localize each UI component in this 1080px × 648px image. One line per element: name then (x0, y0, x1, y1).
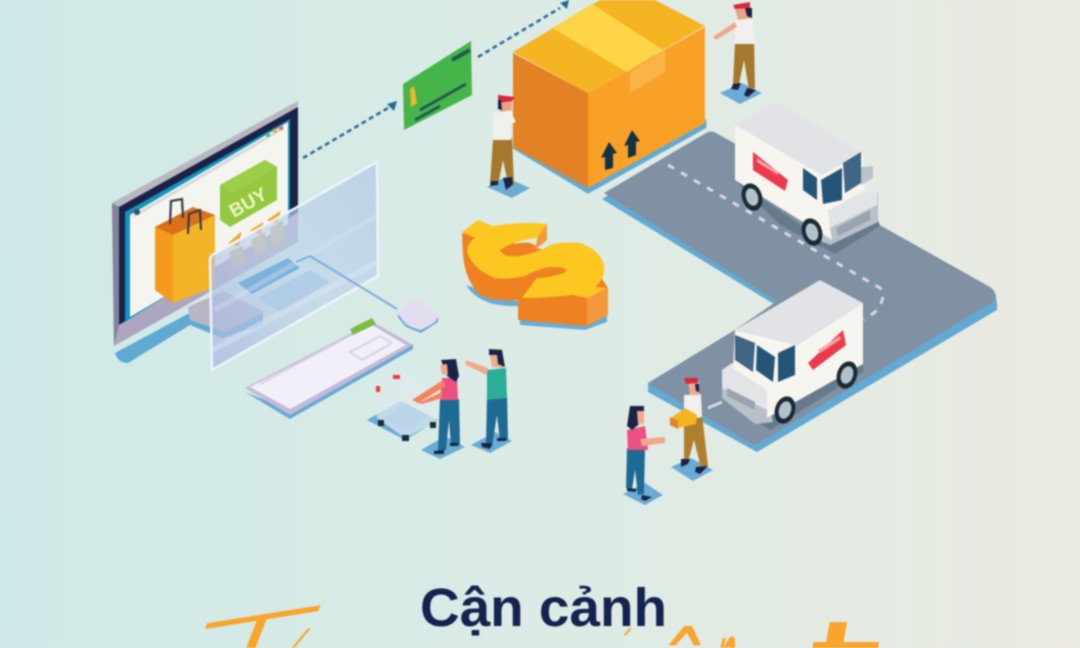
this-way-up arrows (601, 130, 640, 170)
van shadow (735, 180, 880, 254)
icon: computer monitor (112, 101, 298, 363)
item arrows (230, 213, 279, 245)
monitor shadow (115, 310, 263, 363)
icon: mouse (397, 300, 438, 333)
person: man pointing (465, 349, 512, 453)
monitor stand (188, 291, 265, 332)
shopping bag (155, 199, 215, 303)
BUY sign (220, 160, 277, 227)
shadow (466, 285, 607, 330)
van shadow (722, 360, 863, 430)
wheels (738, 181, 766, 213)
tape (552, 4, 663, 72)
heading: Thương mại điện tử (204, 604, 880, 648)
person: delivery worker by box (487, 95, 530, 198)
screen (130, 122, 288, 317)
van: upper (735, 102, 880, 254)
van: lower (722, 280, 863, 430)
dashed arrow: card to box (478, 0, 569, 57)
front and bumper (722, 375, 773, 424)
icon: keyboard (245, 318, 413, 419)
cab front (822, 153, 865, 210)
side (735, 125, 832, 240)
icon: dollar sign (462, 220, 608, 330)
person: woman with cart (412, 359, 465, 459)
extrusion (462, 233, 608, 326)
road (602, 132, 997, 452)
monitor body (112, 101, 298, 346)
shopping cart (367, 372, 438, 441)
person: delivery worker top right (713, 2, 762, 104)
icon: shipping box (513, 0, 705, 192)
roof (735, 280, 863, 345)
person: courier handing parcel (670, 378, 713, 481)
right face (588, 27, 705, 188)
BUY sign: BUY (226, 184, 272, 222)
top face (513, 0, 705, 93)
dashed arrow: computer to card (303, 101, 397, 158)
wheels (771, 394, 799, 426)
cab front (733, 330, 797, 395)
icon: credit card (403, 41, 472, 130)
person: customer woman (623, 406, 665, 505)
side (767, 303, 863, 418)
base shadow (513, 122, 705, 192)
roof (735, 102, 863, 175)
mouse cable (296, 256, 397, 309)
heading: Cận cảnh: Cận cảnh (420, 578, 667, 638)
windows (735, 335, 755, 372)
windows (803, 168, 817, 200)
top face (462, 220, 607, 298)
front and bumper (817, 193, 878, 245)
logo (753, 152, 788, 191)
left face (513, 53, 588, 188)
glass panel (210, 162, 378, 370)
logo (808, 330, 846, 370)
